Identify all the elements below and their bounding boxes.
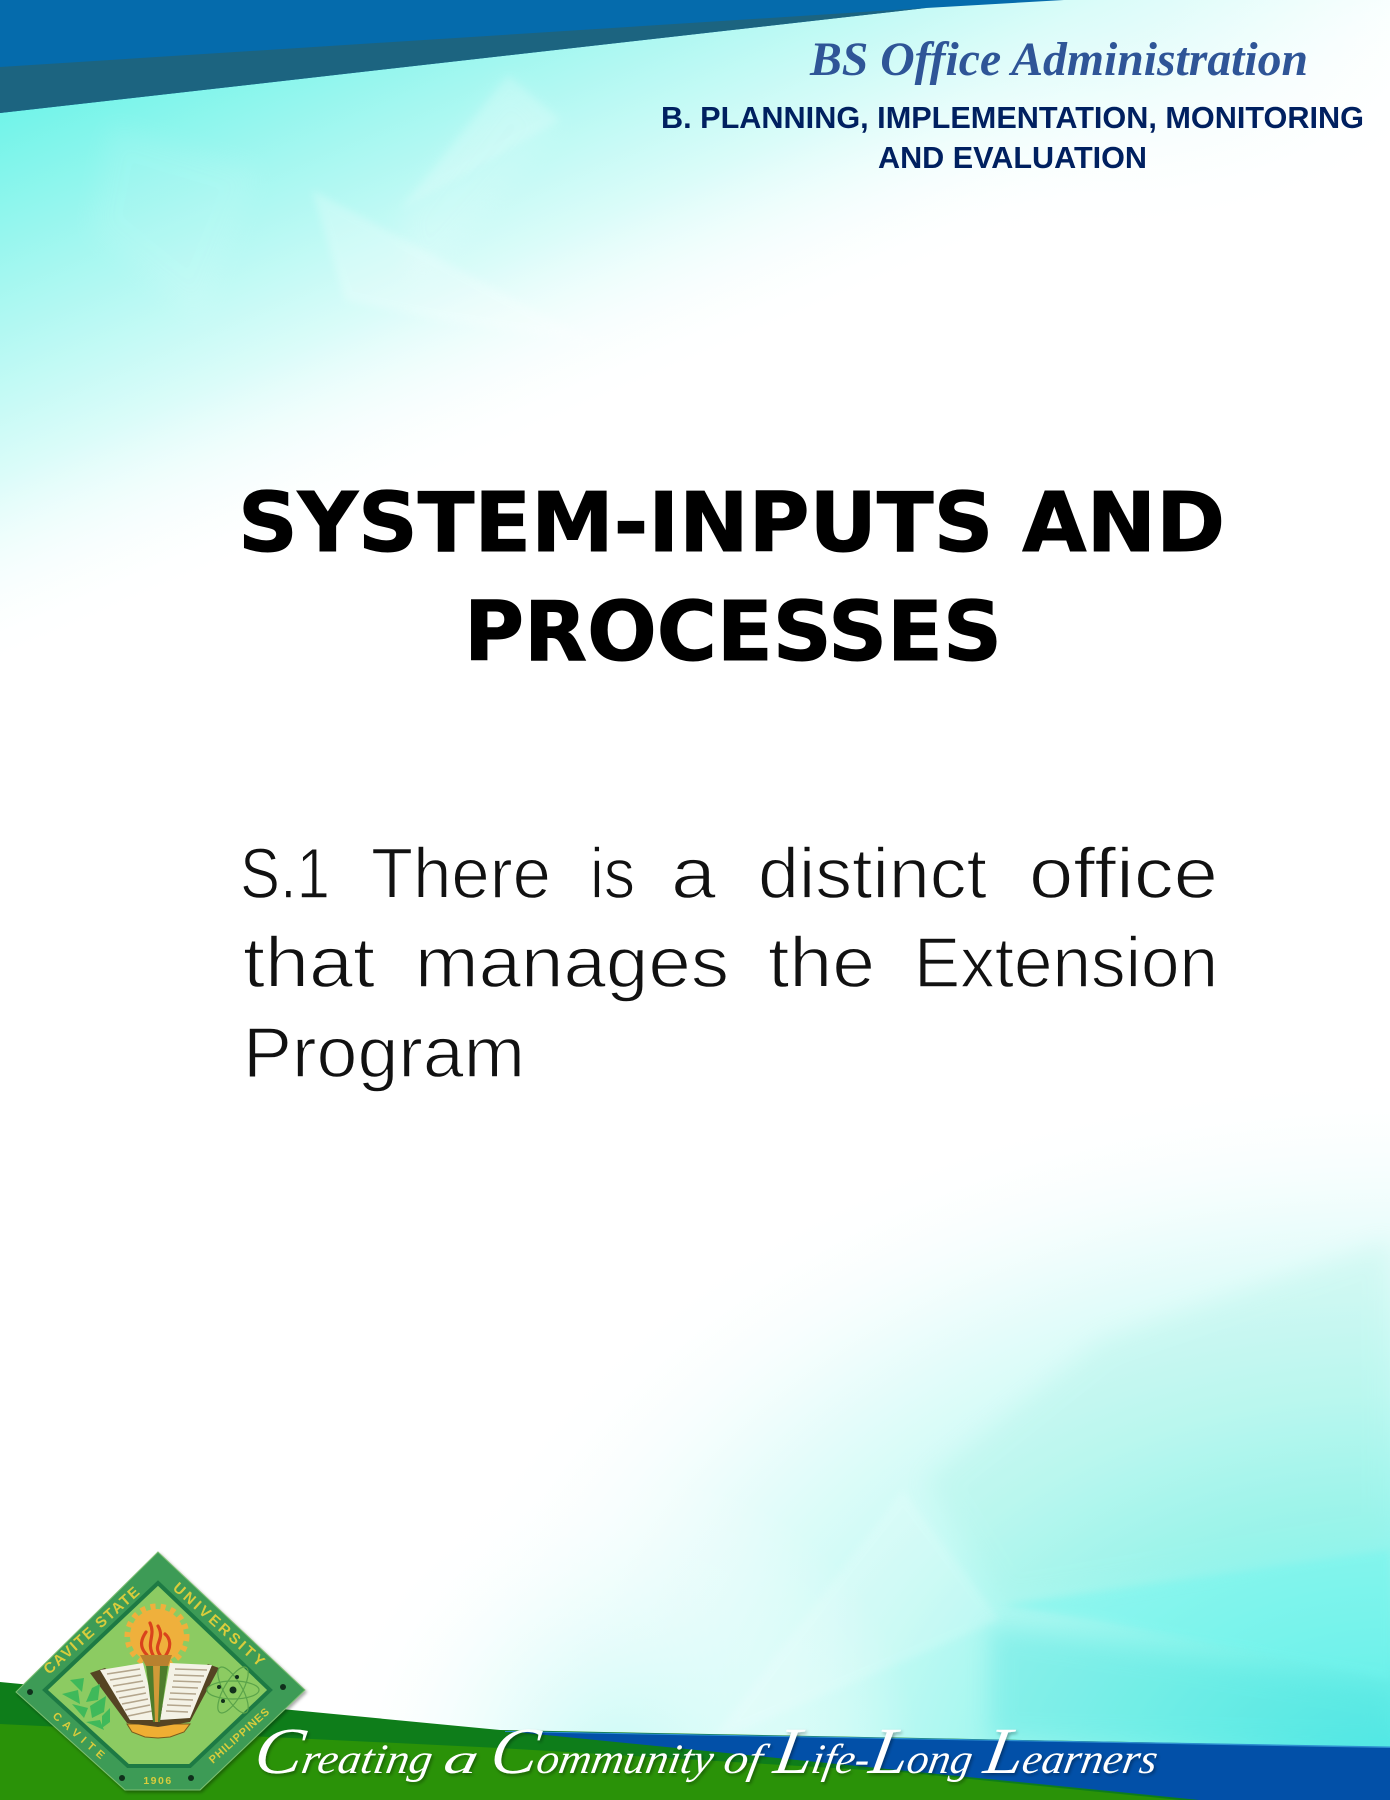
icon: torch handle xyxy=(140,1655,172,1722)
bottom banner xyxy=(0,1682,1390,1800)
icon: torch flame xyxy=(142,1623,170,1655)
body text: office xyxy=(1029,835,1218,914)
body text: that xyxy=(243,924,375,1003)
tagline: Community xyxy=(485,1715,721,1788)
body text: Program xyxy=(243,1014,525,1093)
seal ring text xyxy=(44,1582,269,1787)
seal ring text: PHILIPPINES xyxy=(208,1708,269,1764)
icon: plant xyxy=(62,1678,110,1730)
body text: a xyxy=(671,835,717,914)
body text: manages xyxy=(415,924,729,1003)
body text: S.1 xyxy=(240,835,330,914)
header: section name: B. PLANNING, IMPLEMENTATION, MONITORING xyxy=(661,100,1364,135)
icon: gear base xyxy=(127,1724,190,1738)
body text: is xyxy=(590,835,635,914)
top banner xyxy=(0,0,1064,113)
icon: sun xyxy=(128,1607,186,1665)
seal ring text: 1906 xyxy=(143,1775,173,1787)
seal inner field xyxy=(45,1583,270,1766)
icon: atom xyxy=(207,1663,259,1717)
tagline: a xyxy=(440,1736,482,1783)
seal ring text: CAVITE STATE xyxy=(44,1586,140,1673)
icon: open book xyxy=(90,1663,219,1727)
body text: the xyxy=(768,924,875,1003)
seal ring text: CAVITE xyxy=(54,1712,106,1760)
seal diamond xyxy=(16,1552,305,1790)
tagline: Life-Long xyxy=(768,1715,980,1788)
body text: distinct xyxy=(758,835,987,914)
tagline xyxy=(249,1715,1165,1788)
header: section name xyxy=(661,100,1364,175)
tagline: of xyxy=(720,1736,773,1783)
title xyxy=(238,476,1225,680)
logo: Cavite State University seal xyxy=(15,1551,308,1794)
header: program name: BS Office Administration xyxy=(809,33,1308,86)
tagline: Creating xyxy=(249,1715,440,1788)
header: section name: AND EVALUATION xyxy=(878,140,1147,175)
seal dots xyxy=(27,1684,286,1781)
seal ring text: UNIVERSITY xyxy=(174,1582,266,1665)
tagline: Learners xyxy=(978,1715,1165,1788)
body text: There xyxy=(371,835,551,914)
body text xyxy=(240,835,1218,1093)
title: SYSTEM-INPUTS AND xyxy=(238,476,1225,571)
body text: Extension xyxy=(914,924,1218,1003)
title: PROCESSES xyxy=(464,585,1002,680)
